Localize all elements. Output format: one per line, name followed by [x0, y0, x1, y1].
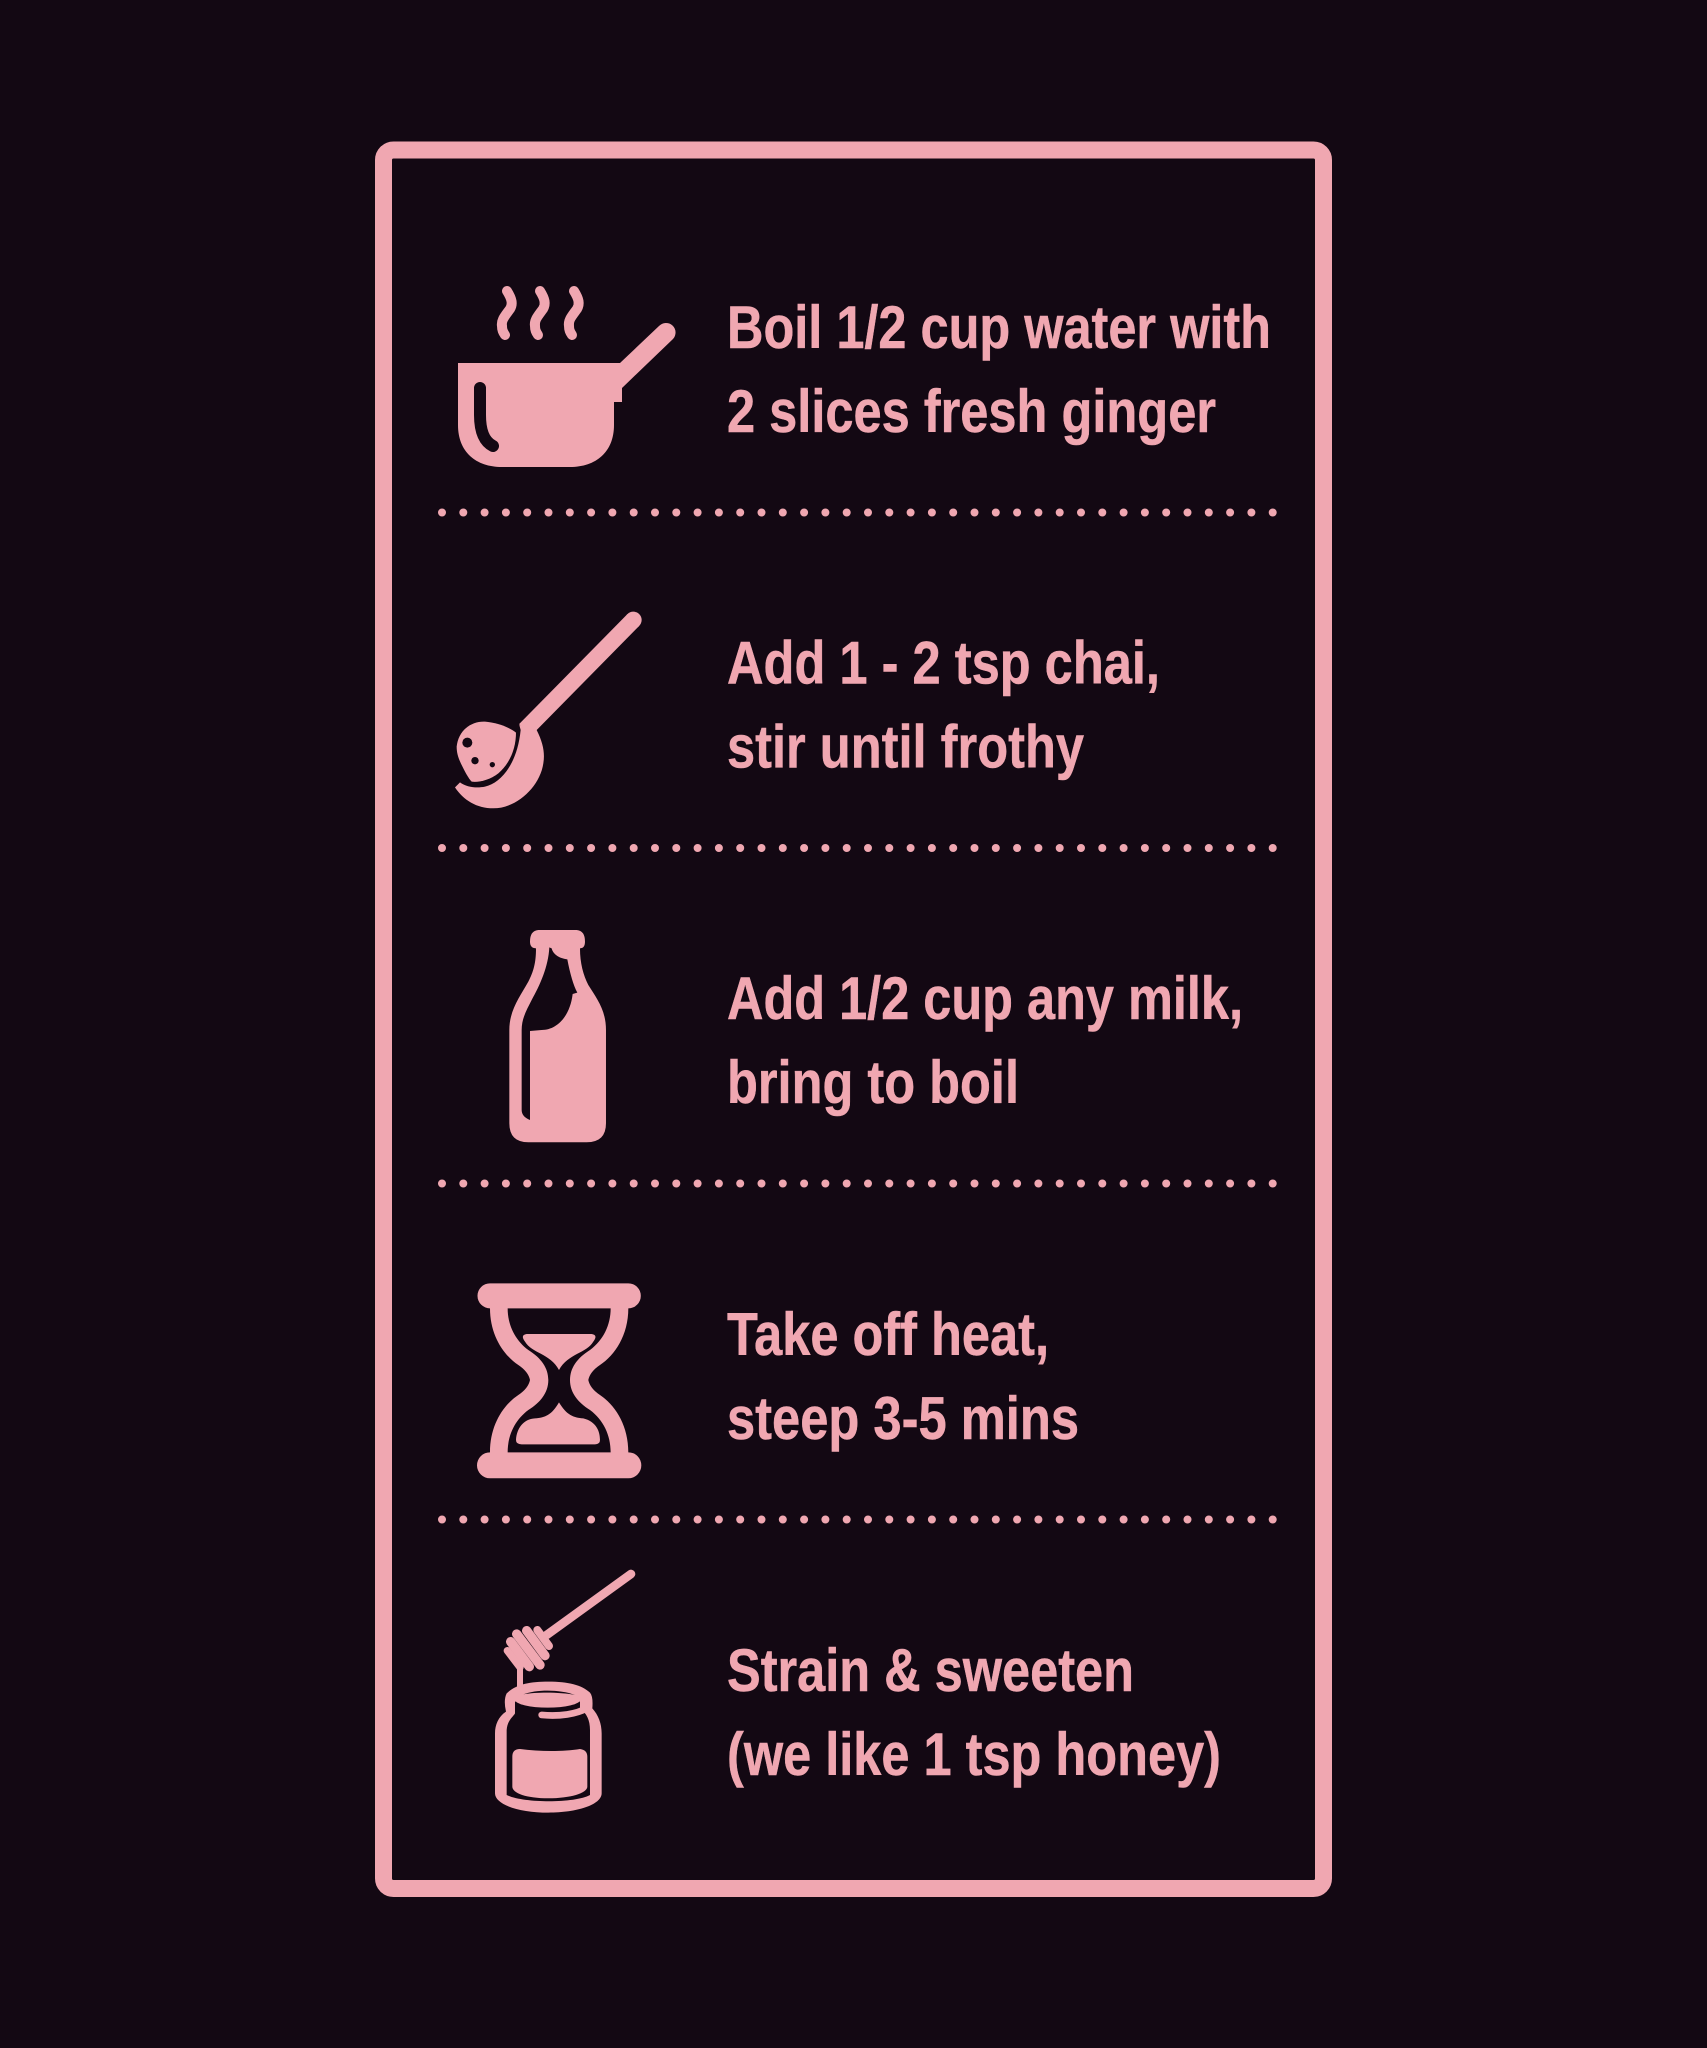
- text: step 5: [727, 1637, 1221, 1788]
- step 1: boil water: [458, 291, 1271, 467]
- text: step 4: [727, 1301, 1079, 1452]
- text: step 1: [727, 294, 1271, 445]
- text: step 3: [727, 965, 1243, 1116]
- step 2: add chai: [455, 612, 1160, 808]
- text: step 5: (we like 1 tsp honey): [727, 1721, 1221, 1788]
- panel: recipe frame: [384, 150, 1324, 1888]
- text: step 2: stir until frothy: [727, 714, 1085, 780]
- divider 4: [442, 1516, 1280, 1524]
- divider 1: [442, 508, 1280, 516]
- icon: spoon with chai: [455, 612, 642, 808]
- step 3: add milk: [509, 930, 1243, 1142]
- text: step 3: bring to boil: [727, 1049, 1019, 1116]
- text: step 5: Strain & sweeten: [727, 1637, 1134, 1704]
- text: step 2: [727, 630, 1160, 780]
- step 5: strain and sweeten: [495, 1574, 1221, 1813]
- icon: steaming pot: [458, 291, 676, 467]
- icon: honey jar with dipper: [495, 1574, 631, 1813]
- text: step 1: Boil 1/2 cup water with: [727, 294, 1271, 361]
- text: step 4: Take off heat,: [727, 1301, 1049, 1368]
- divider 3: [442, 1180, 1280, 1188]
- divider 2: [442, 844, 1280, 852]
- step 4: steep: [477, 1283, 1079, 1478]
- icon: milk bottle: [509, 930, 606, 1142]
- text: step 3: Add 1/2 cup any milk,: [727, 965, 1243, 1032]
- icon: hourglass: [477, 1283, 641, 1478]
- text: step 4: steep 3-5 mins: [727, 1385, 1079, 1452]
- text: step 1: 2 slices fresh ginger: [727, 378, 1216, 445]
- text: step 2: Add 1 - 2 tsp chai,: [727, 630, 1160, 696]
